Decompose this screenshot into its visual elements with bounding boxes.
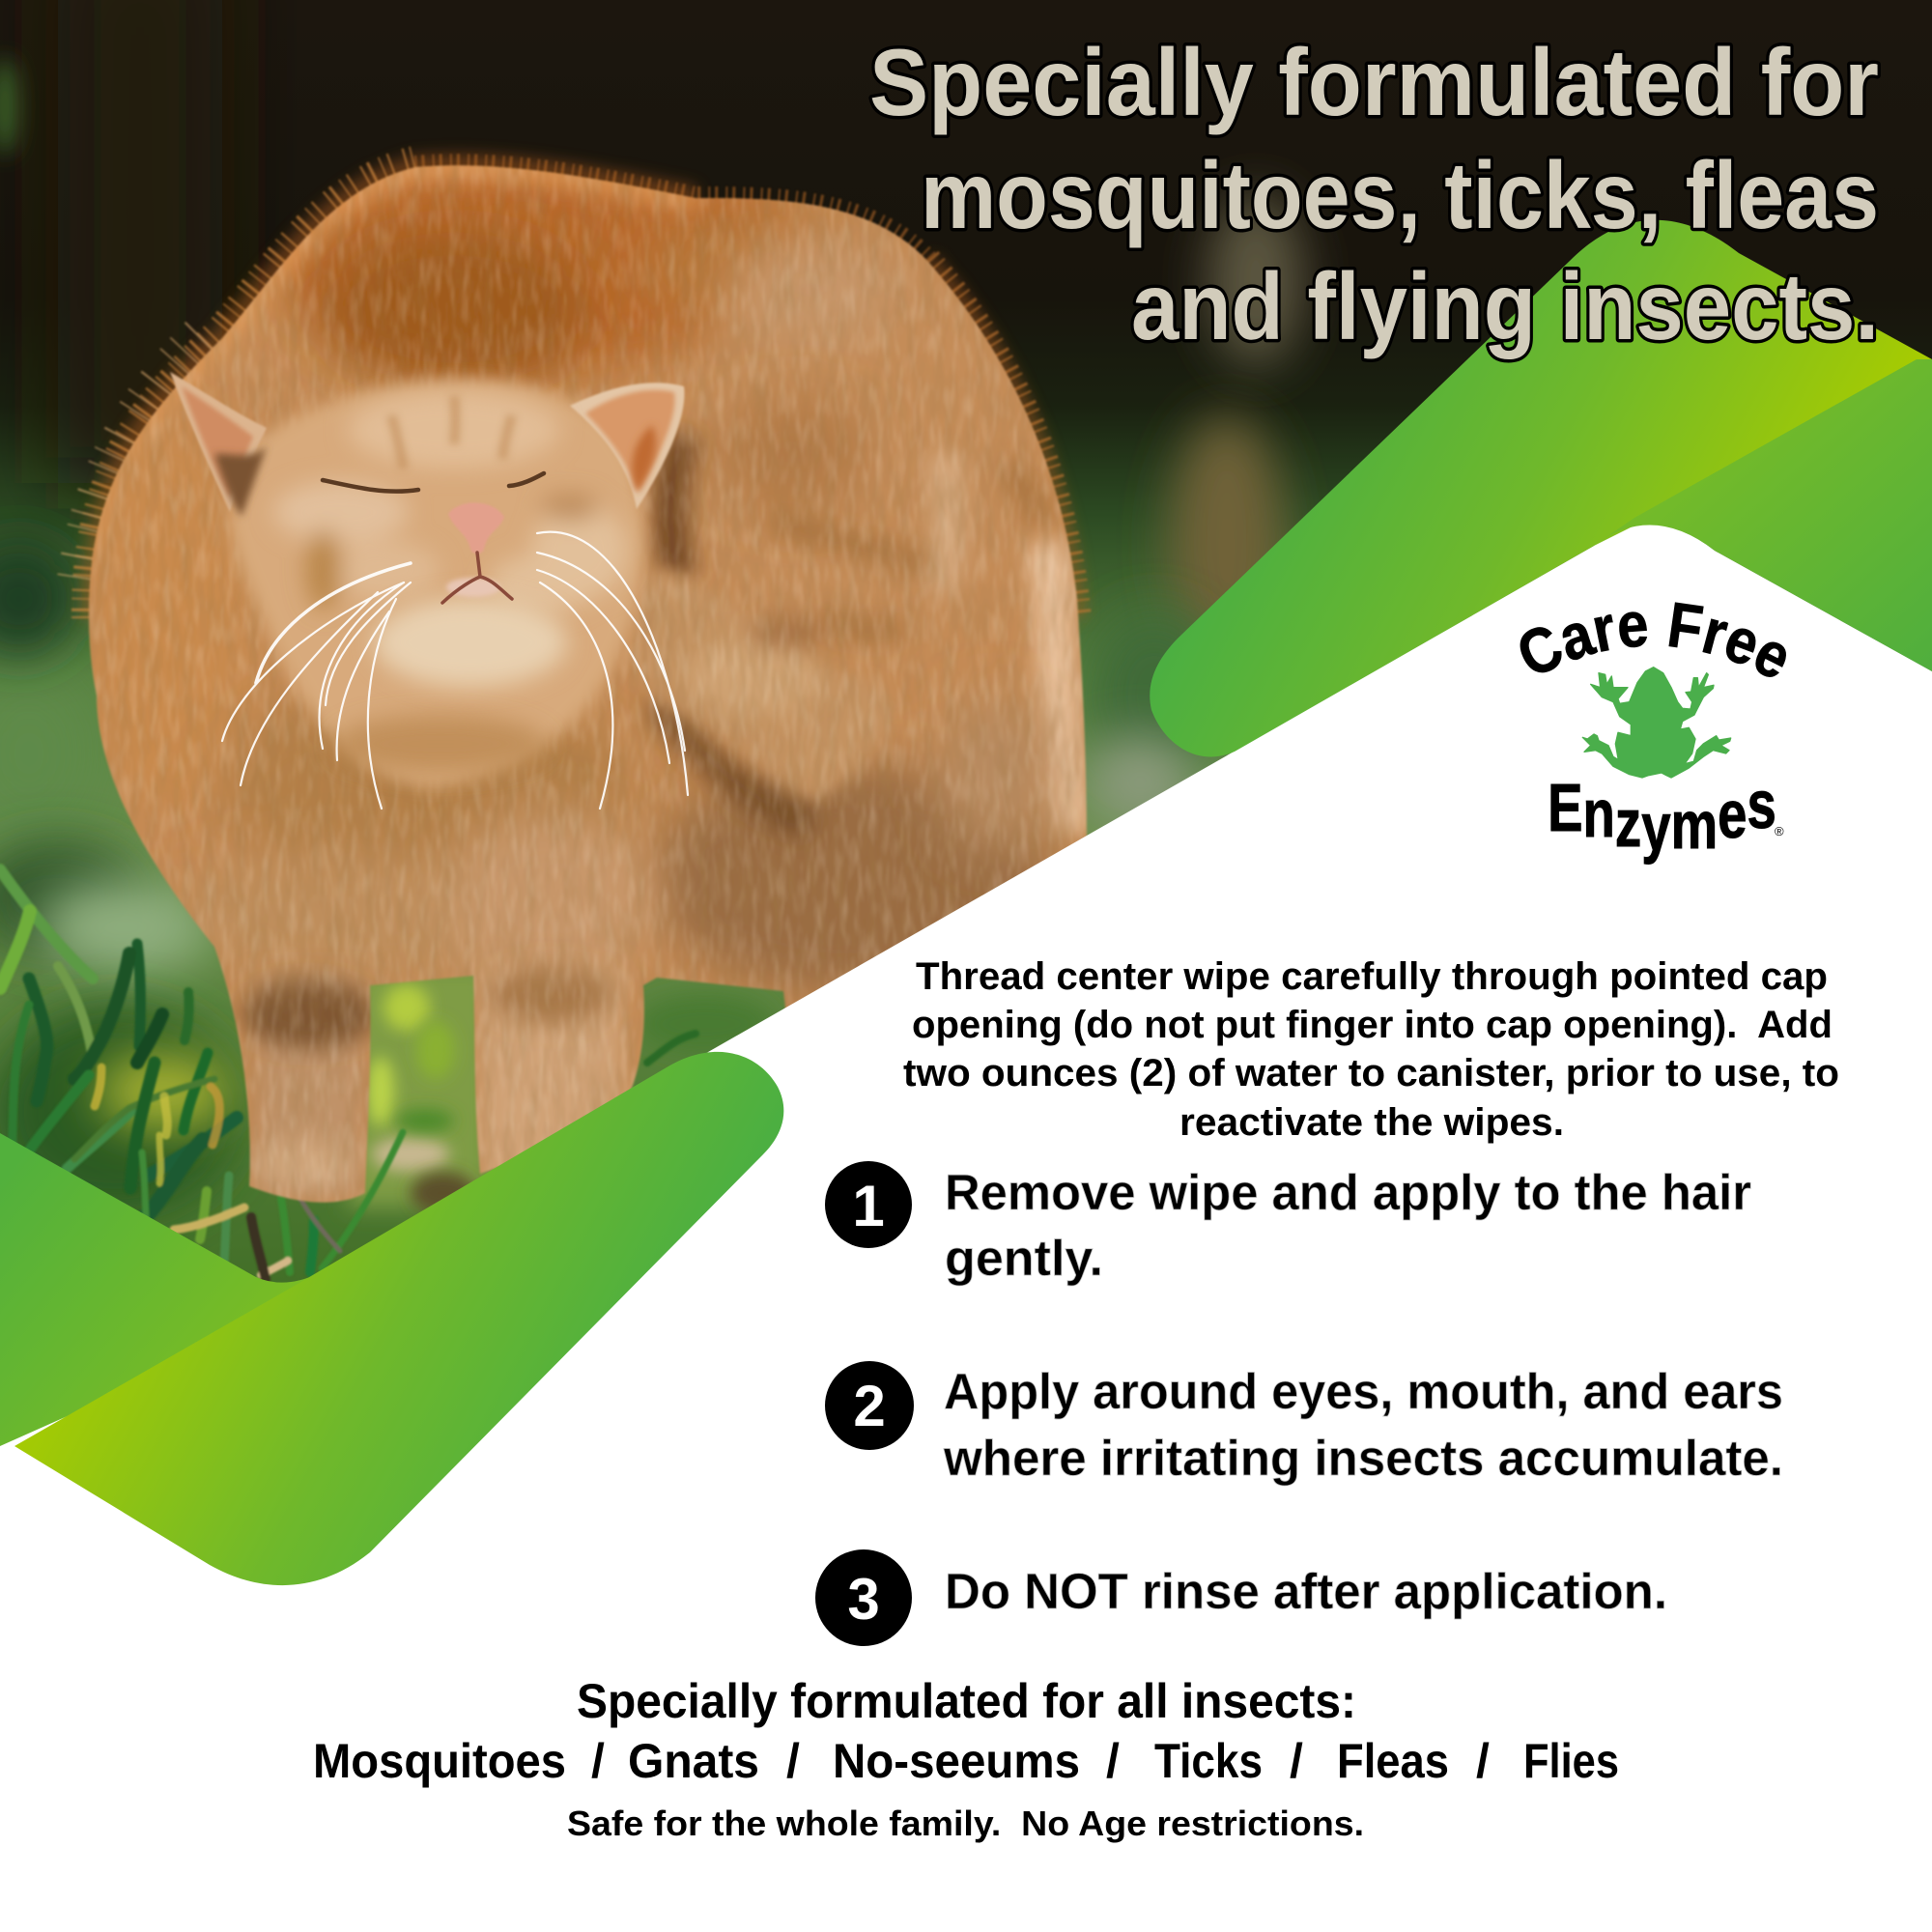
step 1 [825,1161,1751,1287]
step 2 text: Apply around eyes, mouth, and ears [944,1364,1783,1420]
footer text: Gnats [628,1734,759,1788]
accent: green top chevron [1150,220,1932,756]
footer text: / [786,1734,800,1788]
step 3 badge: 3 [847,1567,880,1632]
step 1 text [945,1165,1751,1287]
instruction paragraph: two ounces (2) of water to canister, prior to use, to [903,1052,1839,1094]
step 3 text: Do NOT rinse after application. [945,1564,1667,1620]
footer text: / [591,1734,605,1788]
logo: Care Free Enzymes [1520,602,1786,866]
step 1 badge [825,1161,912,1248]
footer text: Specially formulated for all insects: [577,1674,1356,1728]
cat eyes [323,473,544,492]
cat ears [170,372,267,512]
scratching hind leg [634,565,898,801]
footer text: Fleas [1337,1734,1449,1788]
step 2 [825,1361,1783,1487]
photo background: blurred garden [0,0,1932,1352]
instruction paragraph: reactivate the wipes. [1179,1101,1564,1144]
grass in foreground [0,869,773,1280]
instruction paragraph [903,955,1839,1144]
cat fur halo [89,165,1077,618]
icon: green frog [1582,668,1731,778]
step 3 badge [815,1549,912,1646]
step 1 text: Remove wipe and apply to the hair [945,1165,1751,1221]
logo wordmark top: Care Free [1520,602,1786,677]
footer text: Mosquitoes [313,1734,566,1788]
logo wordmark bottom: Enzymes [1548,768,1776,866]
instruction paragraph: opening (do not put finger into cap opening). Add [912,1004,1833,1046]
footer text: Safe for the whole family. No Age restrictions. [567,1804,1364,1843]
step 1 text: gently. [945,1231,1103,1287]
cat head [170,372,688,809]
footer text [313,1674,1619,1843]
registered mark: ® [1775,824,1784,838]
illustration: ginger cat scratching [58,135,1121,1217]
step 2 text: where irritating insects accumulate. [943,1431,1783,1487]
step 3 [815,1549,1667,1646]
step 1 badge: 1 [852,1174,885,1238]
step 2 badge: 2 [853,1374,886,1438]
cat whiskers [222,532,688,809]
footer text: / [1106,1734,1120,1788]
panel: white content area [0,525,1932,1932]
accent: green lower-left chevron [0,1133,319,1446]
cat nose and mouth [448,502,504,554]
footer text: No-seeums [833,1734,1080,1788]
title: Specially formulated for [869,29,1879,135]
accent: green right chevron [1589,359,1932,671]
step 2 badge [825,1361,914,1450]
step 2 text [943,1364,1783,1487]
cat body silhouette [58,135,1121,1217]
title [869,29,1879,359]
footer text: / [1476,1734,1490,1788]
accent: green bottom chevron [14,1052,783,1585]
cat face markings [273,391,628,773]
footer text: Flies [1523,1734,1619,1788]
footer text: / [1290,1734,1303,1788]
instruction paragraph: Thread center wipe carefully through pointed cap [916,955,1828,998]
footer text: Ticks [1154,1734,1263,1788]
